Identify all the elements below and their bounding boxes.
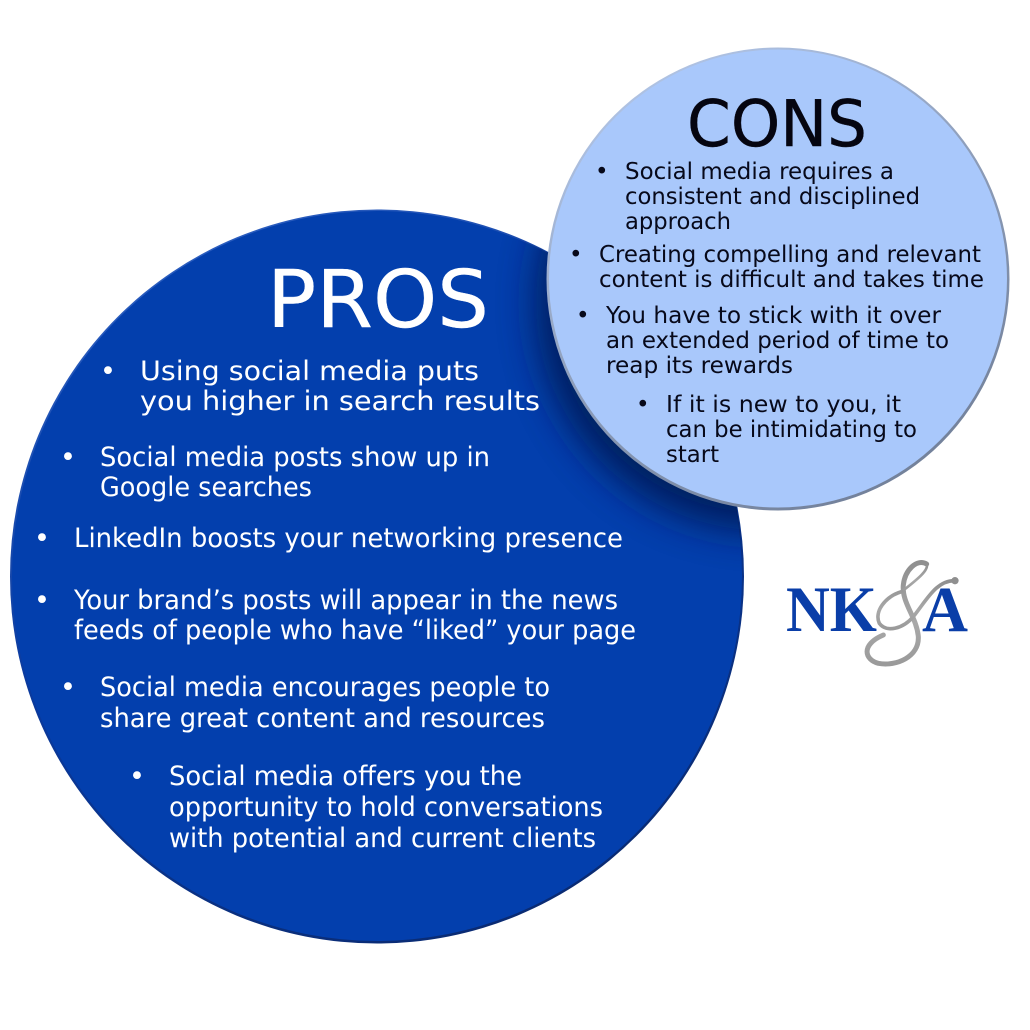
pros item: search results: you higher in search results: [140, 386, 540, 417]
pros item: google searches: Google searches: [100, 472, 312, 503]
pros item: news feeds: Your brand’s posts will appear in the news: [73, 585, 618, 616]
cast shadow from cons circle: [513, 240, 742, 553]
logo: NK&A: [786, 563, 968, 664]
pros item: linkedin: LinkedIn boosts your networking presence: [74, 523, 623, 554]
cons item: stick with it: You have to stick with it over: [605, 303, 942, 329]
pros item: conversations: [129, 761, 603, 854]
cons item: intimidating: If it is new to you, it: [666, 392, 901, 418]
pros item: share content: Social media encourages people to: [100, 672, 550, 703]
pros item: google searches: •: [60, 442, 76, 473]
cons item: stick with it: [576, 303, 949, 379]
pros item: search results: [100, 356, 540, 417]
panel: pros circle: [10, 210, 744, 944]
pros item: news feeds: feeds of people who have “liked” your page: [74, 615, 636, 646]
cons item: compelling content: Creating compelling and relevant: [599, 242, 981, 268]
cons item: compelling content: [569, 242, 984, 293]
cons item: consistent approach: •: [595, 159, 609, 185]
cons item: consistent approach: approach: [625, 209, 731, 235]
cons heading: CONS: [687, 88, 867, 162]
cons item: consistent approach: consistent and disciplined: [625, 184, 920, 210]
pros item: google searches: [60, 442, 490, 503]
logo: NK&A: A: [922, 574, 968, 646]
cons item: consistent approach: Social media requires a: [625, 159, 894, 185]
pros item: share content: [60, 672, 550, 734]
pros item: search results: Using social media puts: [140, 356, 479, 387]
pros item: conversations: with potential and current clients: [169, 823, 596, 854]
pros item: linkedin: •: [34, 523, 50, 554]
cons item: intimidating: [636, 392, 917, 468]
pros item: google searches: Social media posts show up in: [100, 442, 490, 473]
cons item: stick with it: an extended period of time to: [606, 328, 949, 354]
panel: cons circle: [546, 48, 1010, 510]
icon: ampersand swash: [867, 563, 959, 664]
pros item: search results: •: [100, 356, 116, 387]
pros item: news feeds: [34, 585, 636, 646]
cons item: stick with it: reap its rewards: [606, 353, 793, 379]
cons item: stick with it: •: [576, 303, 590, 329]
pros item: conversations: •: [129, 761, 145, 792]
cons item: compelling content: •: [569, 242, 583, 268]
pros item: share content: share great content and resources: [100, 703, 545, 734]
cons item: compelling content: content is difficult and takes time: [599, 267, 984, 293]
cons item: intimidating: •: [636, 392, 650, 418]
pros item: conversations: Social media offers you the: [169, 761, 522, 792]
pros item: news feeds: •: [34, 585, 50, 616]
cons item: intimidating: start: [666, 442, 719, 468]
pros item: conversations: opportunity to hold conversations: [169, 792, 603, 823]
cons item: intimidating: can be intimidating to: [666, 417, 917, 443]
logo: NK&A: NK: [786, 574, 877, 646]
pros item: share content: •: [60, 672, 76, 703]
cons item: consistent approach: [595, 159, 920, 235]
pros heading: PROS: [267, 254, 489, 346]
